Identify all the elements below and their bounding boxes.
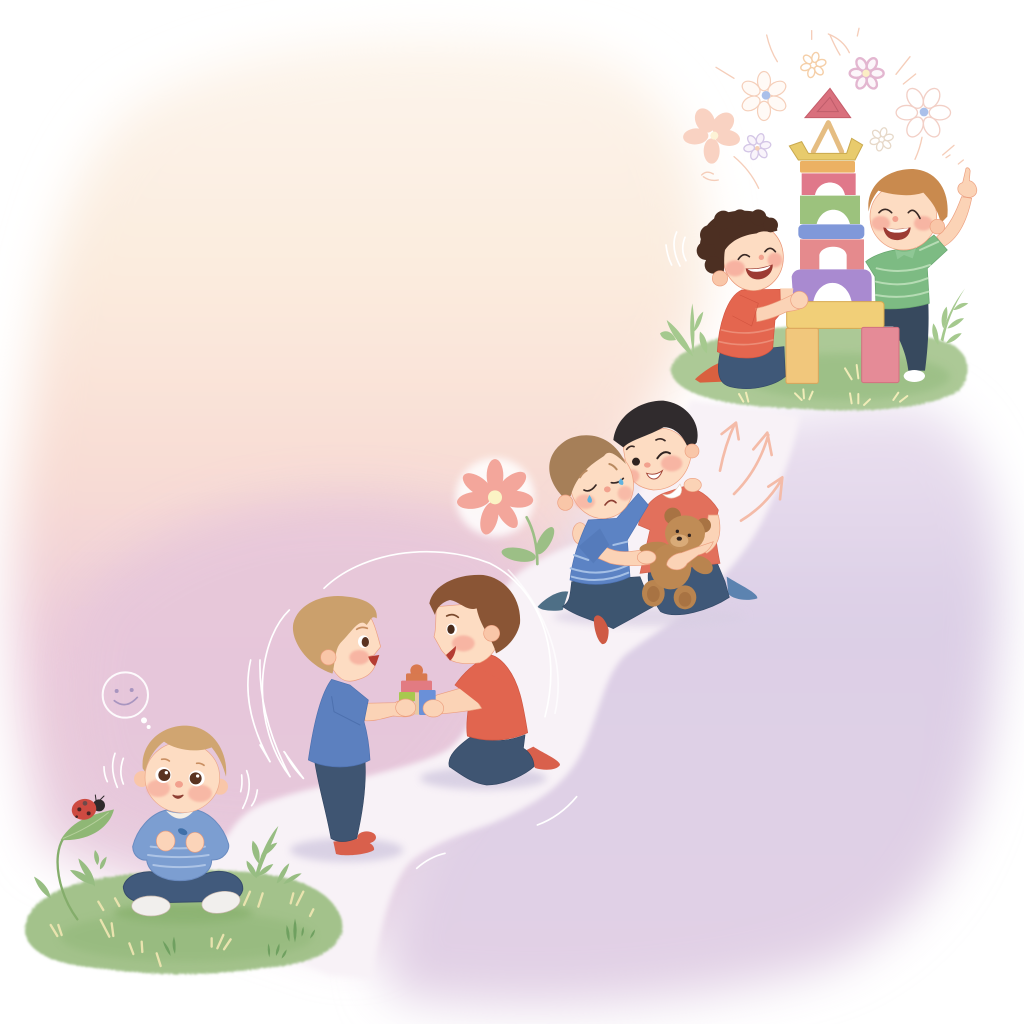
roof triangle inset: [817, 97, 838, 112]
baby shoes: [132, 888, 242, 916]
baby sweater: [133, 809, 229, 881]
coral window block: [800, 239, 864, 269]
winding white path: [150, 400, 800, 978]
motion lines around baby: [104, 660, 303, 808]
glowing flower: [456, 458, 558, 564]
orange slab: [800, 161, 855, 173]
crying boy red shoe: [594, 615, 609, 644]
crying boy hand on back: [573, 523, 587, 544]
left boy face: [723, 224, 783, 291]
standing boy eye and brow: [357, 627, 369, 648]
baby cheeks: [147, 780, 212, 802]
crying boy sleeve: [578, 528, 609, 563]
dark-haired boy eyes and mouth: [627, 439, 670, 479]
small toy: [177, 827, 188, 836]
kneeling boy ear: [484, 625, 500, 641]
standing boy shirt: [308, 679, 370, 767]
crying boy hair: [549, 435, 626, 497]
sweater stripes: [148, 847, 209, 867]
right boy face: [870, 183, 937, 250]
hands on blocks: [396, 699, 444, 717]
kneeling boy trousers: [449, 735, 534, 785]
celebration sparkle lines: [702, 28, 963, 188]
baby ears: [134, 771, 228, 795]
block tower: [399, 664, 436, 715]
scene 1: baby on the grass: [25, 660, 343, 974]
grass tufts and plants: [34, 826, 315, 959]
left boy curly hair: [697, 209, 778, 275]
scene 2: two children sharing blocks: [260, 552, 577, 868]
right boy smile: [879, 209, 920, 240]
right boy hair: [868, 169, 948, 223]
right boy shoe: [904, 370, 925, 382]
thought bubble with smiley: [103, 672, 151, 729]
pale tufts on top mound: [739, 365, 907, 405]
motion lines left: [666, 232, 686, 266]
right column: [862, 327, 899, 383]
left boy cheeks: [725, 253, 782, 276]
crying boy arm: [598, 547, 655, 566]
left boy shirt: [717, 289, 781, 358]
green arch: [800, 196, 860, 224]
standing boy arm: [363, 700, 415, 721]
ladybug on a leaf: [58, 795, 114, 919]
baby figure: [123, 726, 243, 916]
crying boy hand on teddy: [637, 551, 656, 564]
right boy collar: [895, 248, 916, 259]
peach filled flower: [682, 105, 741, 164]
kneeling boy mouth: [446, 646, 456, 661]
blue slab: [798, 224, 864, 239]
plants on the top mound: [660, 288, 968, 357]
left boy shirt stripes: [719, 328, 773, 345]
standing boy sleeve line: [332, 697, 360, 725]
kneeling boy shirt: [455, 655, 528, 740]
baby legs: [123, 871, 243, 903]
kneeling boy arms: [423, 688, 482, 716]
crying boy sad face details: [580, 464, 623, 505]
standing boy trousers: [315, 761, 365, 842]
grass mound: [25, 870, 343, 974]
celebration flowers: [682, 49, 960, 164]
kneeling boy shoe: [527, 747, 560, 770]
dark-haired boy face: [623, 428, 691, 490]
baby brows, nose and mouth: [162, 759, 204, 798]
shadow under hug: [553, 607, 747, 627]
block tower: [786, 88, 899, 383]
right boy shirt stripes: [876, 242, 938, 297]
standing boy mouth: [368, 655, 379, 666]
left boy: [695, 209, 808, 389]
crying boy trousers: [563, 577, 653, 629]
yellow crown block: [789, 138, 863, 160]
kneeling boy cheek: [452, 635, 475, 651]
standing boy hair: [293, 596, 377, 673]
dark-haired boy collar: [663, 484, 682, 498]
kneeling boy eye and brow: [446, 615, 458, 635]
roof triangle block: [805, 88, 851, 118]
dark-haired boy cheeks: [626, 455, 682, 483]
crying boy face: [563, 442, 640, 524]
crying boy ear: [558, 495, 573, 510]
dark-haired boy foot: [727, 577, 757, 600]
dark-haired boy: [613, 401, 757, 615]
kneeling boy hair: [429, 575, 520, 653]
dark-haired boy shirt: [638, 487, 720, 573]
baby face: [145, 742, 220, 813]
right boy: [866, 168, 977, 382]
right boy cheeks: [871, 216, 933, 231]
dark-haired boy hair: [613, 401, 698, 451]
teddy bear: [639, 508, 716, 609]
dark-haired boy ear: [685, 444, 699, 458]
left boy sleeve: [733, 295, 758, 326]
A-frame block: [813, 123, 842, 152]
crying boy shirt: [570, 493, 648, 584]
right boy shirt: [866, 235, 947, 309]
baby hair: [143, 726, 226, 777]
kneeling boy face: [434, 603, 500, 664]
collar: [166, 811, 194, 819]
crying boy shirt stripes: [571, 542, 628, 580]
dark-haired boy trousers: [648, 562, 729, 615]
standing boy shoes: [333, 831, 376, 855]
left boy smile: [738, 248, 775, 279]
dark-haired boy upper arm: [697, 515, 720, 553]
scene 3: comforting hug with teddy: [456, 401, 782, 644]
pale grass strokes: [51, 892, 313, 966]
baby hands: [156, 831, 204, 852]
standing boy: [293, 596, 415, 855]
scene 4: building a block tower together: [660, 28, 977, 410]
ground shadows: [290, 767, 547, 862]
right boy ear: [930, 219, 945, 234]
left boy arm behind: [780, 288, 793, 303]
standing boy cheek: [349, 650, 369, 665]
upward arrows: [720, 423, 782, 521]
baby eyes: [155, 767, 205, 786]
crying boy left foot: [538, 591, 568, 611]
standing boy face: [327, 607, 381, 681]
kneeling boy sleeve: [455, 665, 507, 708]
dark-haired boy forearm around teddy: [667, 542, 713, 570]
kneeling boy: [423, 575, 560, 785]
right boy hand with pointing finger: [958, 168, 977, 197]
standing boy ear: [321, 650, 336, 665]
purple arch: [792, 269, 872, 302]
left boy ear: [712, 271, 728, 286]
left boy trousers: [718, 347, 785, 389]
outlined flowers: [740, 72, 788, 120]
right boy trousers: [884, 303, 929, 371]
yellow slab: [787, 302, 884, 328]
dark-haired boy hand on shoulder: [684, 478, 701, 492]
crying boy cheeks: [575, 486, 632, 509]
pink arch: [802, 173, 856, 195]
right boy raised arm: [937, 197, 972, 247]
left boy foot: [695, 363, 724, 383]
grass mound top: [671, 326, 968, 410]
circular motion arcs: [260, 552, 577, 868]
crying boy: [538, 435, 655, 644]
left column: [786, 328, 818, 383]
left boy front arm: [756, 293, 807, 322]
left boy hand: [791, 291, 808, 309]
